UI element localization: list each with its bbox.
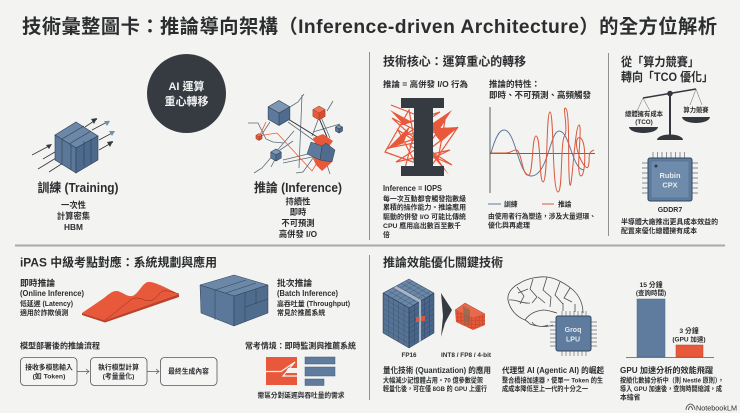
text: training traits: 一次性 bbox=[61, 200, 86, 210]
text: batch inference: (Batch Inference) bbox=[277, 289, 338, 298]
label: exam scenario: 常考情境：即時監測與推薦系統 bbox=[245, 340, 356, 350]
text: agentic AI: 代理型 AI (Agentic AI) 的崛起 bbox=[502, 365, 604, 375]
text: training traits: 計算密集 bbox=[57, 211, 90, 221]
label: training: 訓練 (Training) bbox=[38, 180, 118, 195]
text: online inference: 低延遲 (Latency) bbox=[20, 299, 73, 308]
panel: technical core bbox=[383, 54, 596, 239]
text: inference traits: 即時 bbox=[290, 207, 307, 217]
text: GPU analysis: 導入 GPU 加速後，查詢時間縮減，成 bbox=[620, 384, 722, 393]
flow step 2: 執行模型計算 bbox=[98, 362, 139, 372]
text: TCO caption bbox=[621, 217, 718, 235]
text: inference equals IO: 推論 = 高併發 I/O 行為 bbox=[383, 79, 468, 89]
text: agentic AI: 成成本降低至上一代的十分之一 bbox=[502, 384, 588, 393]
text: inference IOPS bbox=[383, 184, 466, 239]
text: chart caption: 優化與再處理 bbox=[488, 220, 530, 230]
icon: brain and LPU: Groq bbox=[565, 327, 581, 334]
text: GPU analysis: 按績化數據分析中（則 Nestlé 原則）， bbox=[620, 376, 724, 384]
arrow bbox=[147, 369, 159, 374]
text: quantization: 輕量化後，可在僅 8GB 的 GPU 上運行 bbox=[383, 384, 487, 393]
icon: balance scale: 算力競賽 bbox=[683, 105, 709, 114]
icon: balance scale: 總體擁有成本 bbox=[625, 109, 664, 118]
callout: AI shift circle bbox=[147, 54, 226, 133]
text: scenario caption: 需區分對延遲與吞吐量的需求 bbox=[258, 390, 345, 400]
bar chart: GPU speedup: 15 分鐘 bbox=[639, 280, 663, 289]
text: training traits bbox=[57, 200, 90, 232]
flow step 2: (考量量化) bbox=[103, 372, 134, 380]
text: chart caption: 由使用者行為塑造，涉及大量迴環、 bbox=[488, 212, 596, 220]
text: GPU analysis: 本縮省 bbox=[620, 392, 641, 402]
icon: red wave surface bbox=[82, 282, 179, 322]
icon: latency vs throughput bbox=[266, 357, 335, 386]
text: agentic AI: 整合橋接加速器，使單一 Token 的生 bbox=[502, 376, 603, 384]
legend: 推論 bbox=[558, 200, 572, 208]
text: online inference: (Online Inference) bbox=[20, 289, 84, 298]
panel: training vs inference bbox=[32, 54, 342, 239]
dividers bbox=[370, 52, 608, 400]
flow step 3 bbox=[160, 358, 217, 386]
icon: Rubin CPX chip: CPX bbox=[662, 180, 678, 190]
flow step 3: 最終生成內容 bbox=[168, 366, 209, 376]
text: batch inference bbox=[277, 277, 350, 317]
heading: TCO bbox=[621, 54, 713, 84]
icon: blue batch cube bbox=[200, 275, 268, 326]
flow step 1 bbox=[20, 358, 77, 386]
label: deployment flow: 模型部署後的推論流程 bbox=[20, 340, 100, 350]
title: 技術彙整圖卡：推論導向架構（Inference-driven Architecture）的全方位解析 bbox=[22, 15, 717, 38]
bar chart: GPU speedup: (GPU 加速) bbox=[672, 334, 706, 344]
heading: optimization: 推論效能優化關鍵技術 bbox=[383, 254, 503, 270]
text: inference characteristics: 即時、不可預測、高頻觸發 bbox=[489, 90, 591, 100]
icon: training cube with arrows bbox=[32, 118, 115, 173]
badge: NotebookLM: NotebookLM bbox=[696, 406, 737, 412]
text: inference traits: 不可預測 bbox=[281, 218, 315, 228]
label: inference: 推論 (Inference) bbox=[254, 180, 342, 195]
icon: quantization cubes: INT8 / FP8 / 4-bit bbox=[441, 352, 492, 359]
text: inference traits: 持續性 bbox=[286, 196, 310, 206]
panel: TCO bbox=[621, 54, 718, 235]
heading: TCO: 轉向「TCO 優化」 bbox=[621, 69, 713, 84]
arrow bbox=[77, 369, 89, 374]
chart: training vs inference waveforms bbox=[490, 107, 595, 193]
flow step 1: (如 Token) bbox=[33, 372, 65, 380]
heading: TCO: 從「算力競賽」 bbox=[621, 54, 699, 69]
text: GPU analysis: GPU 加速分析的效能飛躍 bbox=[620, 365, 713, 375]
heading: iPAS: iPAS 中級考點對應：系統規劃與應用 bbox=[20, 254, 217, 270]
text: inference IOPS: Inference = IOPS bbox=[383, 184, 443, 193]
text: inference IOPS: 驅動的併發 I/O 可能比傳統 bbox=[383, 212, 466, 221]
text: inference characteristics bbox=[489, 79, 591, 100]
text: inference IOPS: CPU 應用高出數百至數千 bbox=[383, 221, 461, 230]
panel: iPAS bbox=[20, 254, 356, 400]
text: inference traits bbox=[279, 196, 318, 239]
text: training traits: HBM bbox=[64, 222, 83, 232]
icon: balance scale bbox=[625, 89, 710, 140]
text: quantization: 大幅減少記憶體占用。70 億參數從架 bbox=[383, 376, 483, 384]
callout: AI shift circle: AI 運算 bbox=[168, 79, 205, 93]
icon: brain and LPU bbox=[508, 277, 597, 356]
text: online inference bbox=[20, 277, 84, 317]
icon: Rubin CPX chip bbox=[642, 152, 698, 201]
icon: Rubin CPX chip: Rubin bbox=[660, 171, 681, 180]
flow diagram bbox=[20, 358, 217, 386]
text: inference IOPS: 累積的操作能力。推論應用 bbox=[383, 202, 466, 212]
text: quantization bbox=[383, 365, 491, 393]
text: TCO caption: 配置來優化總體擁有成本 bbox=[621, 226, 697, 235]
badge: NotebookLM bbox=[686, 404, 737, 412]
flow step 2 bbox=[90, 358, 147, 386]
label: GDDR7: GDDR7 bbox=[658, 207, 682, 214]
bar chart: GPU speedup: 3 分鐘 bbox=[679, 326, 699, 335]
bar chart: GPU speedup: (查詢時間) bbox=[636, 288, 666, 297]
text: inference characteristics: 推論的特性： bbox=[489, 79, 540, 89]
icon: quantization cubes bbox=[383, 279, 492, 359]
text: online inference: 適用於詐欺偵測 bbox=[20, 308, 68, 317]
icon: I with red spikes bbox=[385, 98, 458, 176]
text: batch inference: 批次推論 bbox=[277, 277, 312, 288]
text: chart caption bbox=[488, 212, 596, 230]
text: quantization: 量化技術 (Quantization) 的應用 bbox=[383, 365, 491, 375]
flow step 1: 接收多模態輸入 bbox=[25, 362, 73, 372]
text: online inference: 即時推論 bbox=[20, 277, 55, 288]
icon: inference network bbox=[248, 94, 342, 174]
legend: 訓練 bbox=[504, 200, 518, 208]
legend bbox=[488, 200, 572, 208]
bar chart: GPU speedup bbox=[626, 280, 714, 358]
icon: quantization cubes: FP16 bbox=[401, 352, 417, 359]
text: agentic AI bbox=[502, 365, 604, 393]
text: inference traits: 高併發 I/O bbox=[279, 229, 318, 239]
text: batch inference: 高吞吐量 (Throughput) bbox=[277, 299, 350, 308]
text: batch inference: 常見於推薦系統 bbox=[277, 308, 325, 317]
text: inference IOPS: 倍 bbox=[383, 230, 390, 239]
callout: AI shift circle: 重心轉移 bbox=[164, 94, 208, 108]
text: GPU analysis bbox=[620, 365, 724, 402]
heading: technical core: 技術核心：運算重心的轉移 bbox=[383, 54, 526, 68]
icon: brain and LPU: LPU bbox=[566, 336, 580, 344]
panel: optimization bbox=[383, 254, 724, 402]
text: inference IOPS: 每一次互動都會觸發指數級 bbox=[383, 194, 466, 203]
text: TCO caption: 半導體大廠推出更具成本效益的 bbox=[621, 217, 718, 226]
icon: balance scale: (TCO) bbox=[635, 119, 653, 126]
